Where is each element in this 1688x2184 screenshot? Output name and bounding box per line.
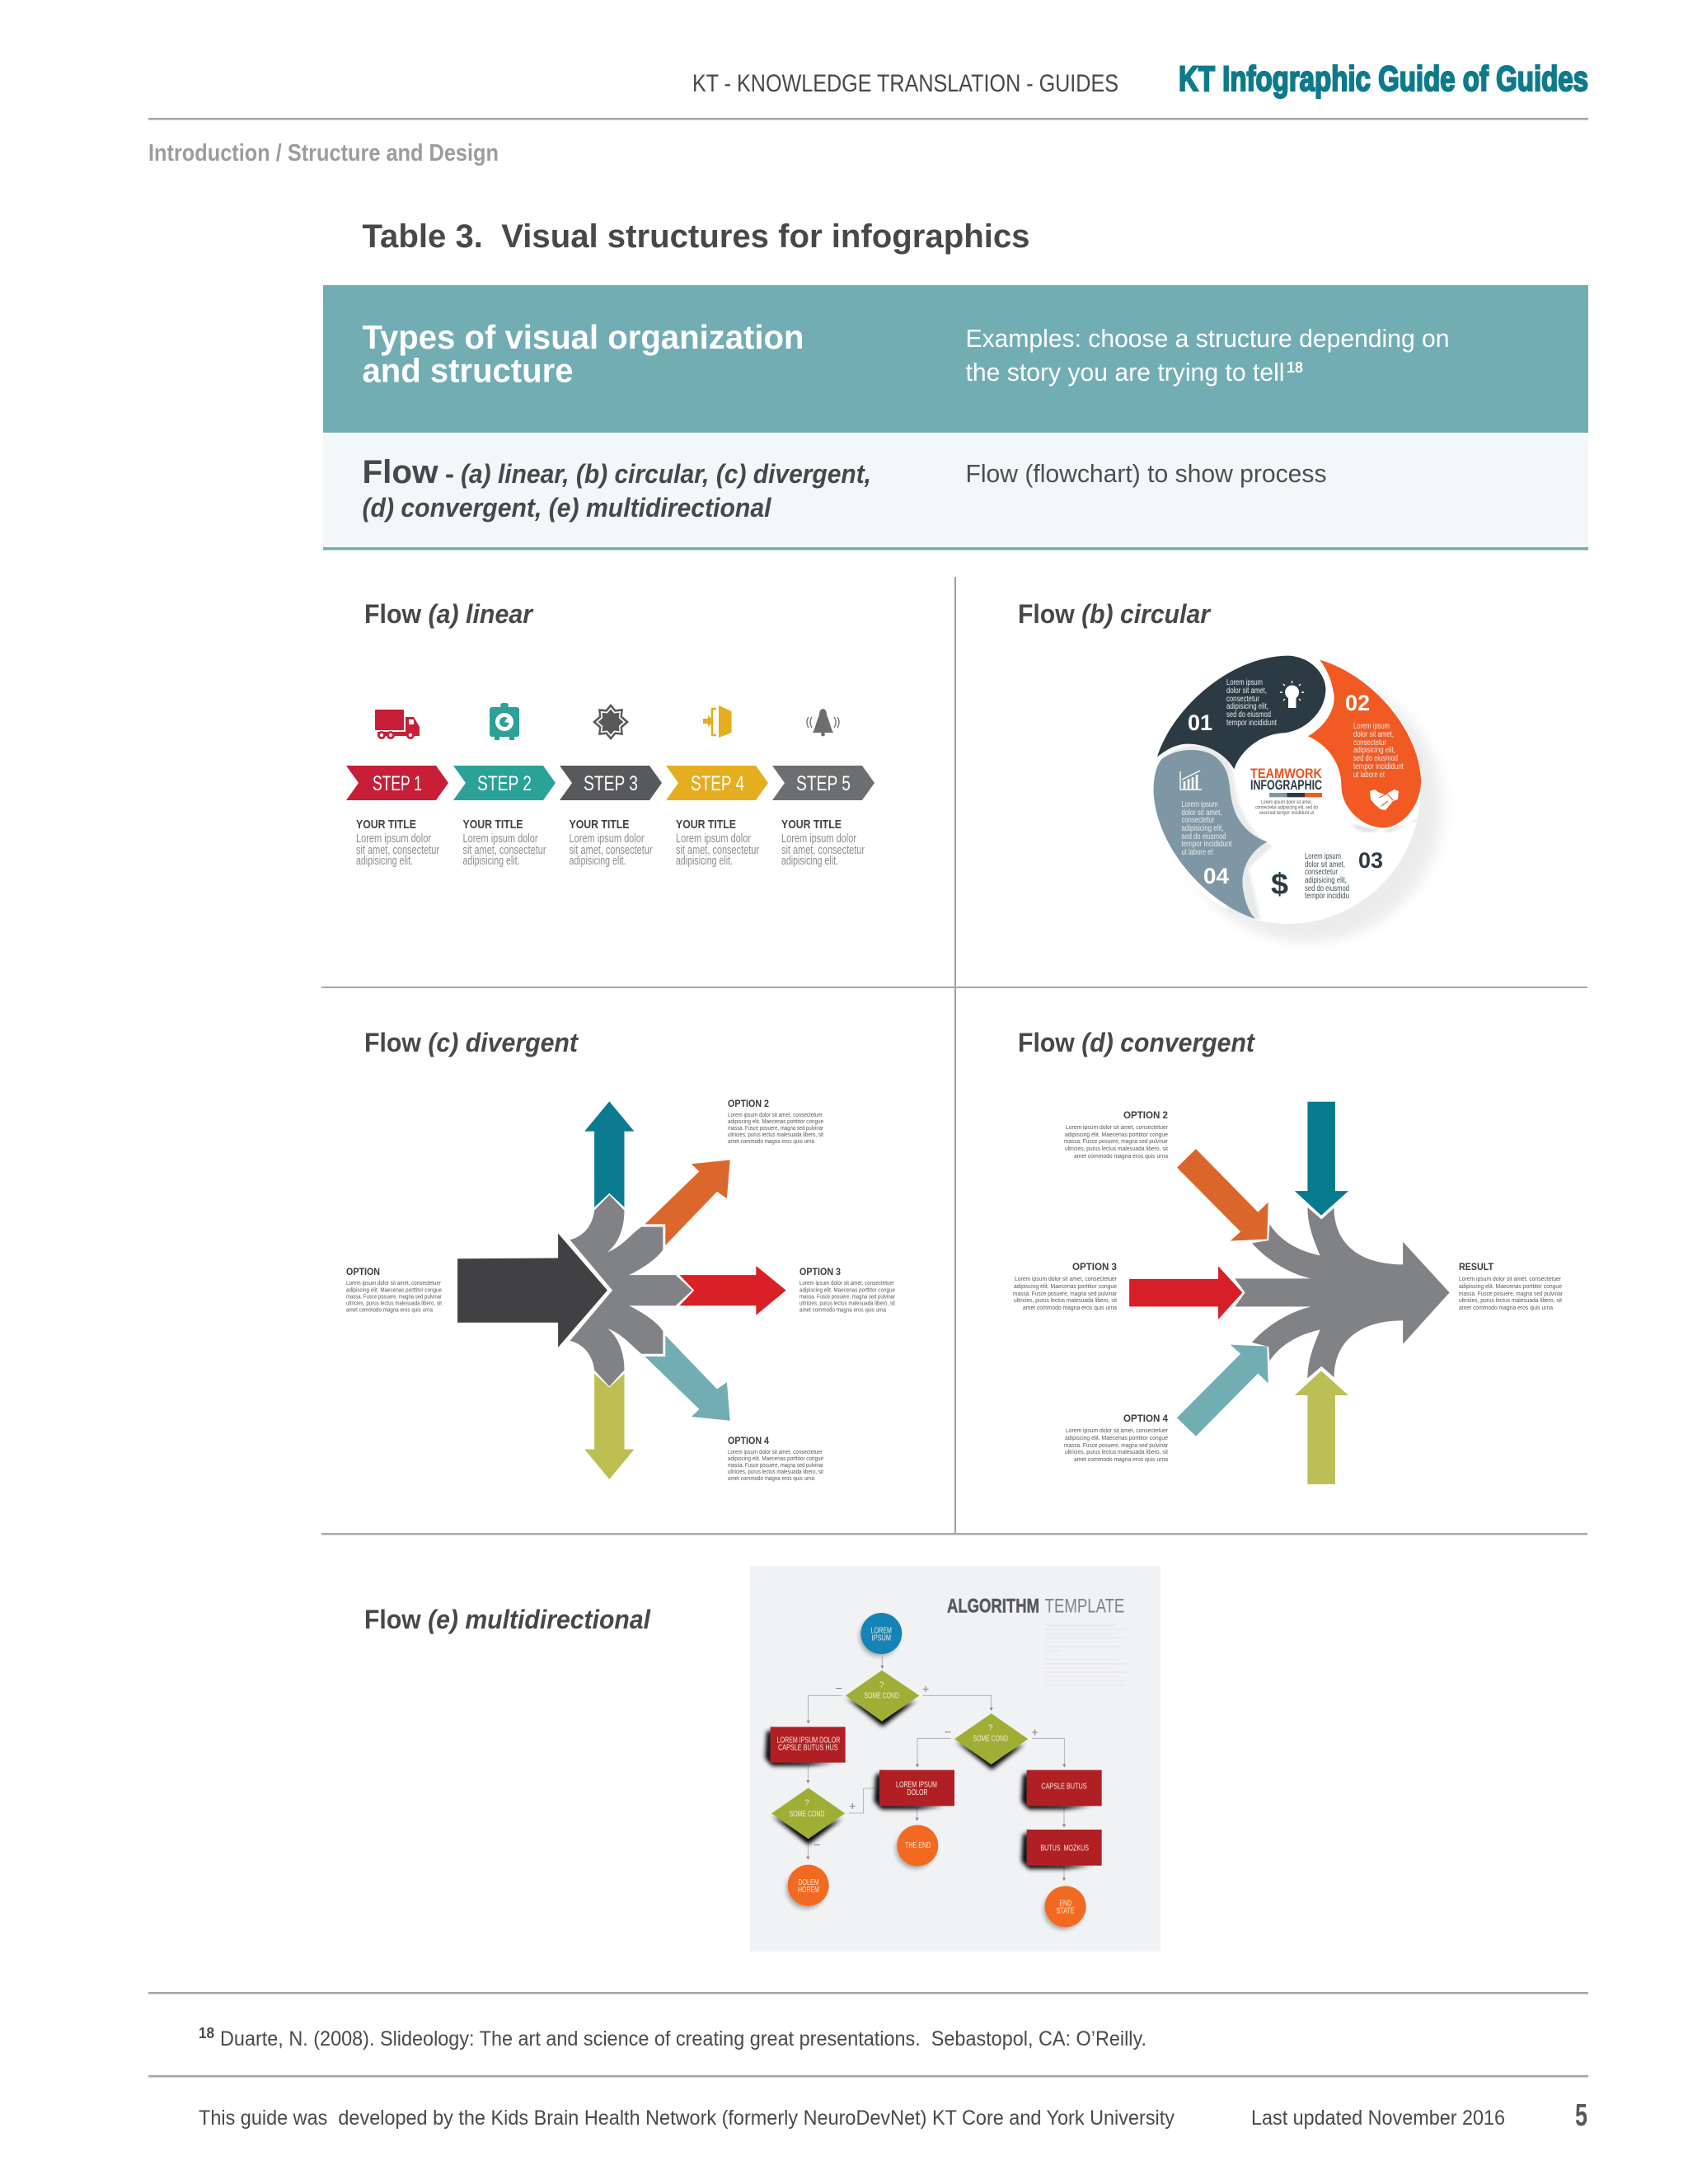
- running header: [148, 59, 1588, 166]
- start circle: IPSUM: [872, 1634, 891, 1643]
- option 3 text: Lorem ipsum dolor sit amet, consectetuer: [1015, 1275, 1117, 1282]
- flow type list: (d) convergent, (e) multidirectional: [363, 493, 772, 523]
- option 3 text: OPTION 3: [1072, 1261, 1117, 1272]
- step 4: sit amet, consectetur: [676, 843, 759, 857]
- option 4 text: ultricies, purus lectus malesuada libero, sit: [1065, 1448, 1169, 1455]
- result text: amet commodo magna eros quis urna: [1459, 1304, 1554, 1311]
- option 4 text: Lorem ipsum dolor sit amet, consectetuer: [728, 1448, 823, 1455]
- centre title: consectetur adipisicing elit, sed do: [1255, 804, 1318, 811]
- option 3 text: OPTION 3: [799, 1266, 841, 1277]
- template title: [947, 1596, 1124, 1618]
- step 2: STEP 2: [477, 772, 532, 795]
- option text left: ultricies, purus lectus malesuada libero, sit: [346, 1299, 443, 1307]
- step 2: [453, 766, 556, 868]
- step 3: YOUR TITLE: [569, 818, 630, 832]
- option 3 text: massa. Fusce posuere, magna sed pulvinar: [799, 1292, 895, 1301]
- process box 1: CAPSLE BUTUS HUS: [778, 1744, 838, 1753]
- option 2 text: Lorem ipsum dolor sit amet, consectetuer: [1066, 1123, 1168, 1131]
- icon: alarm clock: [490, 703, 519, 740]
- segment 01 dark: [1157, 656, 1325, 769]
- page footer: [148, 2075, 1588, 2133]
- header column two: the story you are trying to tell: [966, 359, 1284, 387]
- start circle: LOREM: [871, 1626, 892, 1635]
- heading: flow c: Flow (c) divergent: [364, 1028, 579, 1057]
- start circle: [860, 1613, 902, 1654]
- option 4 text: massa. Fusce posuere, magna sed pulvinar: [728, 1461, 823, 1469]
- number 04 with text: 04: [1203, 864, 1229, 888]
- number 02 with text: ut labore et: [1353, 771, 1385, 780]
- header column two: 18: [1287, 359, 1303, 376]
- step 1: adipisicing elit.: [356, 854, 413, 868]
- end circle 1: DOLEM: [798, 1878, 819, 1887]
- icon: door with arrow: [703, 705, 732, 738]
- header column one: and structure: [363, 351, 574, 389]
- icon: truck: [375, 710, 420, 739]
- flow type list: -: [445, 459, 454, 489]
- centre title: Lorem ipsum dolor sit amet,: [1261, 799, 1312, 805]
- option 4 text: amet commodo magna eros quis urna: [1074, 1455, 1169, 1463]
- end circle 1: HOREM: [798, 1886, 819, 1895]
- table title: Table 3. Visual structures for infographics: [363, 218, 1030, 255]
- heading: flow b: Flow (b) circular: [1018, 599, 1211, 629]
- step 1: Lorem ipsum dolor: [356, 832, 431, 846]
- step 4: YOUR TITLE: [676, 818, 736, 832]
- number 02 with text: [1345, 691, 1404, 780]
- option 3 text: [799, 1266, 896, 1314]
- option 2 text: Lorem ipsum dolor sit amet, consectetuer: [728, 1111, 823, 1118]
- option text left: adipiscing elit. Maecenas porttitor congue: [346, 1286, 442, 1294]
- plus and minus signs: −: [835, 1683, 842, 1696]
- decision 3: ?: [804, 1799, 809, 1808]
- step 1: [346, 766, 448, 868]
- decision 2: [954, 1713, 1028, 1765]
- arrow in teal: [1295, 1102, 1348, 1216]
- flow type list: (a) linear, (b) circular, (c) divergent,: [461, 459, 871, 489]
- option 3 text: ultricies, purus lectus malesuada libero, sit: [1014, 1296, 1118, 1304]
- template title: ALGORITHM: [947, 1596, 1039, 1618]
- option 3 text: amet commodo magna eros quis urna: [1023, 1304, 1118, 1311]
- end circle 1: [788, 1865, 829, 1906]
- centre title: TEAMWORK: [1250, 766, 1323, 781]
- header guide label: KT - KNOWLEDGE TRANSLATION - GUIDES: [692, 70, 1118, 97]
- number 03 with text: Lorem ipsum: [1305, 852, 1341, 861]
- number 04 with text: sed do eiusmod: [1182, 832, 1226, 841]
- option 2 text: OPTION 2: [728, 1098, 769, 1109]
- icon: light bulb: [1280, 681, 1304, 708]
- heading: flow a: Flow (a) linear: [364, 599, 533, 629]
- option 4 text: [728, 1435, 824, 1482]
- result text: ultricies, purus lectus malesuada libero, sit: [1459, 1296, 1563, 1304]
- number 03 with text: tempor incididu: [1305, 892, 1349, 901]
- option 4 text: amet commodo magna eros quis urna: [728, 1474, 815, 1482]
- grey merged arrow: [1235, 1207, 1450, 1378]
- process box 4: [1027, 1830, 1102, 1866]
- footnote: 18: [199, 2025, 214, 2041]
- end circle 3: [1045, 1886, 1086, 1927]
- number 04 with text: [1182, 800, 1232, 888]
- icon: ringing bell: [807, 709, 839, 736]
- step 1: sit amet, consectetur: [356, 843, 439, 857]
- option 3 text: adipiscing elit. Maecenas porttitor congue: [799, 1286, 895, 1294]
- number 01 with text: Lorem ipsum: [1226, 678, 1263, 687]
- icon: dollar sign: $: [1271, 867, 1288, 901]
- step 4: Lorem ipsum dolor: [676, 832, 751, 846]
- icon: bar chart: [1180, 771, 1202, 790]
- step 1: STEP 1: [373, 772, 422, 795]
- panel: flow c divergent: [346, 1028, 896, 1482]
- step 4: [666, 766, 768, 868]
- plus and minus signs: +: [849, 1800, 856, 1813]
- decision 2: SOME COND: [973, 1735, 1008, 1744]
- centre title: INFOGRAPHIC: [1250, 777, 1322, 793]
- segment 04 grey: [1154, 750, 1267, 919]
- decision 3: SOME COND: [790, 1810, 824, 1819]
- segment 02 orange: [1308, 660, 1421, 827]
- arrow right red: [679, 1266, 786, 1315]
- arrow in olive: [1295, 1371, 1348, 1484]
- decision 1: ?: [879, 1680, 884, 1690]
- end circle 3: STATE: [1057, 1907, 1075, 1916]
- decision 3: [771, 1788, 845, 1839]
- arrow up-right orange: [645, 1160, 730, 1245]
- step 2: YOUR TITLE: [463, 818, 523, 832]
- step 5: YOUR TITLE: [781, 818, 842, 832]
- circular diagram: [1154, 656, 1442, 942]
- option text left: OPTION: [346, 1266, 380, 1277]
- arrow in light teal: [1177, 1345, 1268, 1436]
- grey junction: [570, 1195, 692, 1386]
- plus and minus signs: +: [922, 1683, 929, 1696]
- footnote: Duarte, N. (2008). Slideology: The art and science of creating great presentations. Sebastopol, CA: O’Reilly.: [220, 2027, 1146, 2050]
- heading: flow d: Flow (d) convergent: [1018, 1028, 1255, 1057]
- option 2 text: [728, 1098, 824, 1145]
- connectors: [806, 1657, 1066, 1881]
- convergent arrows: [1129, 1102, 1450, 1484]
- process box 3: [1027, 1770, 1102, 1806]
- number 04 with text: ut labore et: [1182, 848, 1213, 857]
- decision 1: [846, 1671, 919, 1722]
- option text left: massa. Fusce posuere, magna sed pulvinar: [346, 1292, 442, 1301]
- option 3 text: adipiscing elit. Maecenas porttitor congue: [1014, 1282, 1117, 1290]
- centre title: [1250, 766, 1323, 816]
- option 2 text: OPTION 2: [1123, 1109, 1168, 1121]
- decision 1: SOME COND: [864, 1692, 899, 1701]
- option 4 text: [1064, 1413, 1169, 1463]
- panel: flow d convergent: [1013, 1028, 1563, 1484]
- option text left: Lorem ipsum dolor sit amet, consectetuer: [346, 1279, 441, 1286]
- icon: starburst: [593, 704, 629, 740]
- number 04 with text: Lorem ipsum: [1182, 800, 1218, 809]
- arrow down olive: [584, 1373, 634, 1479]
- option 2 text: amet commodo magna eros quis urna: [1074, 1152, 1169, 1160]
- step 5: Lorem ipsum dolor: [781, 832, 856, 846]
- option 3 text: massa. Fusce posuere, magna sed pulvinar: [1013, 1290, 1117, 1297]
- arrow in red: [1129, 1266, 1242, 1319]
- footer date: Last updated November 2016: [1251, 2107, 1505, 2130]
- header column one: Types of visual organization: [363, 318, 804, 356]
- number 01 with text: tempor incididunt: [1226, 719, 1277, 728]
- flow type list: [363, 454, 871, 523]
- process box 1: [771, 1727, 846, 1763]
- arrow down-right light teal: [645, 1335, 730, 1421]
- header column one: [363, 318, 804, 389]
- result text: [1459, 1261, 1563, 1311]
- heading: flow e: Flow (e) multidirectional: [364, 1605, 651, 1634]
- option 2 text: adipiscing elit. Maecenas porttitor congue: [1065, 1131, 1168, 1138]
- number 02 with text: consectetur: [1353, 738, 1387, 748]
- number 03 with text: consectetur: [1305, 868, 1339, 877]
- option 4 text: massa. Fusce posuere, magna sed pulvinar: [1064, 1441, 1168, 1449]
- option 2 text: adipiscing elit. Maecenas porttitor congue: [728, 1118, 823, 1125]
- header column two: Examples: choose a structure depending on: [966, 325, 1449, 353]
- step 5: [772, 766, 874, 868]
- option 3 text: Lorem ipsum dolor sit amet, consectetuer: [799, 1279, 894, 1286]
- arrow up teal: [584, 1101, 634, 1207]
- number 03 with text: 03: [1358, 848, 1383, 873]
- source arrow dark: [457, 1233, 607, 1347]
- panel: flow a linear: [346, 599, 874, 868]
- flow type list: Flow: [363, 454, 438, 490]
- process box 4: BUTUS MOZKUS: [1040, 1844, 1089, 1853]
- panel: flow e multidirectional: [364, 1566, 1160, 1952]
- flow example note: Flow (flowchart) to show process: [966, 460, 1327, 488]
- centre title: eiusmod tempor incididunt ut: [1259, 810, 1314, 816]
- number 03 with text: sed do eiusmod: [1305, 884, 1349, 893]
- step 5: adipisicing elit.: [781, 854, 838, 868]
- plus and minus signs: −: [814, 1840, 820, 1853]
- divergent arrows: [457, 1101, 786, 1479]
- plus and minus signs: +: [1031, 1727, 1039, 1740]
- footnote: [148, 1992, 1588, 2050]
- number 01 with text: sed do eiusmod: [1226, 710, 1271, 719]
- number 02 with text: dolor sit amet,: [1353, 730, 1394, 739]
- page number: 5: [1575, 2098, 1587, 2133]
- result text: RESULT: [1459, 1261, 1494, 1272]
- step 2: adipisicing elit.: [463, 854, 519, 868]
- step 3: adipisicing elit.: [569, 854, 626, 868]
- step 1: YOUR TITLE: [356, 818, 416, 832]
- section breadcrumb: Introduction / Structure and Design: [148, 140, 499, 166]
- option 2 text: amet commodo magna eros quis urna: [728, 1137, 815, 1145]
- option 4 text: adipiscing elit. Maecenas porttitor congue: [728, 1455, 823, 1462]
- number 04 with text: dolor sit amet,: [1182, 808, 1221, 818]
- template title: TEMPLATE: [1045, 1596, 1124, 1618]
- option 3 text: [1013, 1261, 1118, 1311]
- number 03 with text: adipisicing elit,: [1305, 876, 1347, 885]
- option text left: amet commodo magna eros quis urna: [346, 1305, 434, 1314]
- process box 2: [879, 1770, 954, 1806]
- number 02 with text: Lorem ipsum: [1353, 722, 1390, 731]
- number 01 with text: 01: [1188, 710, 1212, 735]
- option 3 text: amet commodo magna eros quis urna: [799, 1305, 887, 1314]
- panel: flow b circular: [1018, 599, 1442, 942]
- number 03 with text: [1305, 848, 1383, 901]
- step 4: adipisicing elit.: [676, 854, 733, 868]
- algorithm template flowchart: [750, 1566, 1160, 1952]
- end circle 2: THE END: [905, 1841, 931, 1850]
- table header band: [323, 285, 1588, 433]
- step 3: STEP 3: [584, 772, 638, 795]
- number 02 with text: adipisicing elit,: [1353, 746, 1395, 755]
- option 2 text: [1064, 1109, 1169, 1160]
- option 4 text: adipiscing elit. Maecenas porttitor congue: [1065, 1434, 1168, 1441]
- number 04 with text: adipisicing elit,: [1182, 824, 1223, 833]
- number 02 with text: sed do eiusmod: [1353, 754, 1398, 763]
- shadows: [765, 1698, 1092, 1869]
- step 2: sit amet, consectetur: [463, 843, 546, 857]
- result text: massa. Fusce posuere, magna sed pulvinar: [1459, 1290, 1563, 1297]
- step 4: STEP 4: [691, 772, 744, 795]
- option 3 text: ultricies, purus lectus malesuada libero, sit: [799, 1299, 896, 1307]
- option 2 text: massa. Fusce posuere, magna sed pulvinar: [728, 1124, 823, 1132]
- icon: handshake: [1370, 790, 1399, 810]
- step 5: sit amet, consectetur: [781, 843, 865, 857]
- number 04 with text: consectetur: [1182, 816, 1215, 825]
- process box 1: LOREM IPSUM DOLOR: [777, 1736, 840, 1745]
- option 4 text: OPTION 4: [1123, 1413, 1168, 1424]
- number 02 with text: 02: [1345, 691, 1370, 715]
- number 01 with text: adipisicing elit,: [1226, 702, 1268, 711]
- process box 2: LOREM IPSUM: [896, 1781, 937, 1790]
- step 5: STEP 5: [796, 772, 851, 795]
- result text: Lorem ipsum dolor sit amet, consectetuer: [1459, 1275, 1561, 1282]
- header column two: [966, 325, 1449, 387]
- option 2 text: massa. Fusce posuere, magna sed pulvinar: [1064, 1137, 1168, 1145]
- number 01 with text: consectetur: [1226, 695, 1260, 704]
- plus and minus signs: −: [944, 1726, 951, 1739]
- step 2: Lorem ipsum dolor: [463, 832, 538, 846]
- option 4 text: ultricies, purus lectus malesuada libero, sit: [728, 1468, 824, 1475]
- option 2 text: ultricies, purus lectus malesuada libero, sit: [728, 1131, 824, 1138]
- arrow in orange: [1177, 1149, 1268, 1241]
- footer credit: This guide was developed by the Kids Brain Health Network (formerly NeuroDevNet) KT Core and York University: [199, 2107, 1175, 2130]
- decision 2: ?: [988, 1723, 993, 1732]
- step 3: [560, 766, 662, 868]
- number 03 with text: dolor sit amet,: [1305, 860, 1345, 869]
- number 02 with text: tempor incididunt: [1353, 762, 1404, 771]
- step 3: sit amet, consectetur: [569, 843, 653, 857]
- number 04 with text: tempor incididunt: [1182, 840, 1232, 849]
- result text: adipiscing elit. Maecenas porttitor congue: [1459, 1282, 1562, 1290]
- option 2 text: ultricies, purus lectus malesuada libero, sit: [1065, 1145, 1169, 1152]
- end circle 3: END: [1059, 1899, 1071, 1908]
- process box 2: DOLOR: [907, 1788, 927, 1797]
- option text left: [346, 1266, 443, 1314]
- end circle 2: [897, 1825, 938, 1866]
- number 01 with text: [1188, 678, 1277, 735]
- number 01 with text: dolor sit amet,: [1226, 687, 1267, 696]
- process box 3: CAPSLE BUTUS: [1041, 1783, 1087, 1792]
- option 4 text: Lorem ipsum dolor sit amet, consectetuer: [1066, 1427, 1168, 1434]
- plus and minus signs: [814, 1683, 1039, 1853]
- step 3: Lorem ipsum dolor: [569, 832, 645, 846]
- option 4 text: OPTION 4: [728, 1435, 769, 1446]
- flow row: [323, 433, 1588, 551]
